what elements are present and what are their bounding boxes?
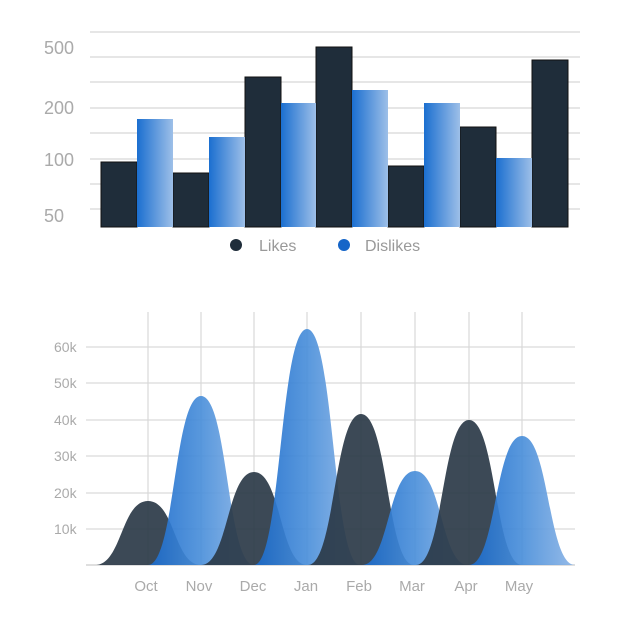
legend: Likes: [259, 238, 296, 255]
x-axis month labels: Mar: [399, 578, 425, 595]
x-axis month labels: Dec: [240, 578, 267, 595]
legend: [230, 238, 420, 255]
x-axis month labels: Nov: [186, 578, 213, 595]
top chart y-axis labels: 500: [44, 38, 74, 58]
top chart y-axis labels: 50: [44, 206, 64, 226]
x-axis month labels: May: [505, 578, 534, 595]
x-axis month labels: Jan: [294, 578, 318, 595]
x-axis month labels: Oct: [134, 578, 158, 595]
x-axis month labels: Apr: [454, 578, 478, 595]
bottom y-axis labels: 50k: [54, 375, 78, 391]
legend: Dislikes: [365, 238, 420, 255]
top chart y-axis labels: 200: [44, 98, 74, 118]
top chart y-axis labels: [44, 38, 74, 226]
bottom y-axis labels: 30k: [54, 448, 78, 464]
x-axis month labels: [134, 578, 534, 595]
bottom y-axis labels: 20k: [54, 485, 78, 501]
bar chart: likes and dislikes: [101, 47, 568, 227]
bottom y-axis labels: 60k: [54, 339, 78, 355]
bottom y-axis labels: 40k: [54, 412, 78, 428]
bottom y-axis labels: 10k: [54, 521, 78, 537]
top chart y-axis labels: 100: [44, 150, 74, 170]
bottom y-axis labels: [54, 339, 78, 537]
area chart: monthly bumps: [95, 329, 575, 565]
x-axis month labels: Feb: [346, 578, 372, 595]
bottom chart grid: [86, 312, 575, 565]
